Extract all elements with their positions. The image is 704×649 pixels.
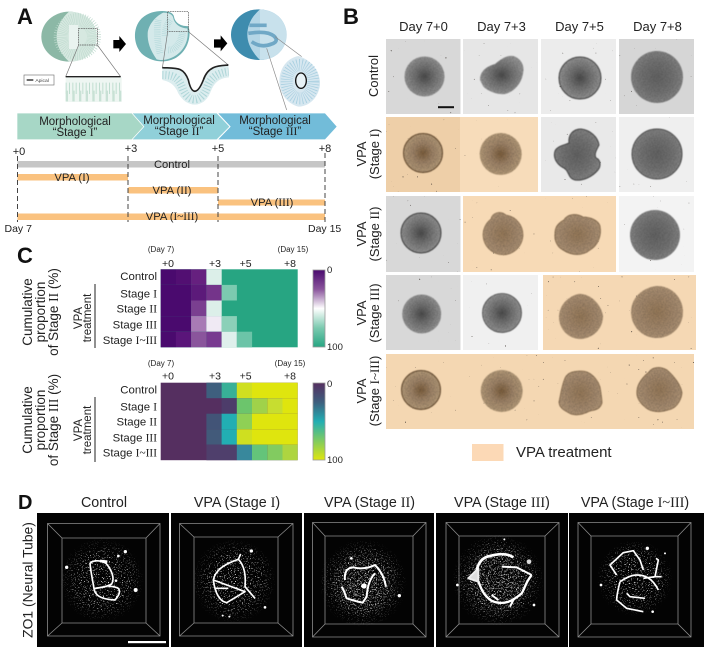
y-axis title: stage III: proportion [33, 390, 48, 450]
VPA treatment label: stage II [73, 284, 95, 348]
row and column labels: stage III: (Day 15) [275, 359, 306, 368]
timeline chart: VPA (III) [251, 197, 294, 209]
organoids: stage I row [404, 129, 682, 180]
row and column labels: stage III: Stage I~III [103, 448, 157, 460]
stage banner III: Morphological [239, 115, 311, 127]
timeline chart: +3 [125, 143, 137, 155]
colour bar: stage III [313, 379, 343, 466]
legend: apical [24, 75, 54, 85]
row and column labels: stage III: Stage I [120, 401, 157, 413]
row labels: (Stage I) [367, 129, 382, 179]
column titles: VPA (Stage III) [454, 495, 550, 511]
y-axis label: ZO1 (Neural Tube) [20, 522, 36, 638]
column headers: Day 7+8 [633, 19, 682, 34]
panel D: ZO1 confocal images [18, 492, 704, 647]
timeline chart: +0 [13, 146, 25, 158]
illustration: stage III organoid [231, 9, 320, 110]
VPA treatment label: stage II: treatment [82, 293, 94, 342]
row and column labels: stage II: (Day 7) [148, 245, 174, 254]
row labels: (Stage III) [367, 283, 382, 343]
arrow 1 [113, 36, 126, 52]
row labels: VPA [354, 141, 369, 167]
row and column labels: stage III: (Day 7) [148, 359, 174, 368]
timeline chart: Day 7 [4, 223, 32, 235]
column headers [399, 19, 682, 34]
timeline chart: +5 [212, 143, 224, 155]
row and column labels: stage II: Stage I~III [103, 335, 157, 347]
stage banner II [133, 113, 229, 139]
row labels: VPA [354, 378, 369, 404]
row and column labels: stage III: Stage II [116, 417, 157, 429]
row and column labels: stage II: Stage II [116, 304, 157, 316]
organoids: stage III row [402, 286, 683, 339]
legend: apical: Apical [35, 78, 49, 84]
row and column labels: stage II: +3 [209, 258, 221, 270]
row and column labels: stage III: Stage III [113, 433, 157, 445]
panel A: stages and timeline [4, 4, 341, 235]
stage banner II: Morphological [143, 115, 215, 127]
panel C: heat maps [17, 243, 343, 466]
stage banner I [17, 113, 143, 139]
VPA treatment label: stage II: VPA [73, 307, 85, 329]
heat map: stage III [161, 383, 298, 460]
stage banner I: “Stage I” [53, 127, 98, 139]
image: VPA stage III [436, 513, 568, 647]
y-axis title: stage II: proportion [33, 282, 48, 342]
column titles [81, 495, 689, 511]
image: VPA stage I [171, 513, 302, 647]
organoids: stage I~III row [402, 368, 682, 415]
row and column labels: stage II: +8 [284, 258, 296, 270]
timeline chart: VPA (I~III) [146, 211, 199, 223]
row and column labels: stage II: Stage III [113, 319, 157, 331]
heading C: C [17, 243, 33, 268]
row labels: Control [366, 55, 381, 97]
legend: VPA treatment [472, 444, 612, 461]
timeline chart: VPA (II) [153, 185, 192, 197]
timeline chart: +8 [319, 143, 331, 155]
row and column labels: stage III: +3 [209, 370, 221, 382]
row and column labels: stage III: Control [120, 384, 157, 396]
stage banner I: Morphological [39, 116, 111, 128]
row and column labels: stage II: (Day 15) [278, 245, 309, 254]
VPA treatment label: stage III [73, 397, 95, 462]
row and column labels: stage III: +8 [284, 370, 296, 382]
timeline chart: Control [154, 159, 190, 171]
column headers: Day 7+0 [399, 19, 448, 34]
column titles: VPA (Stage I) [194, 495, 280, 511]
image backgrounds [386, 39, 696, 429]
row and column labels: stage II: +0 [162, 258, 174, 270]
debris specks [386, 39, 696, 430]
row labels: (Stage I~III) [367, 356, 382, 426]
colour bar: stage II: 100 [327, 342, 343, 353]
legend: VPA treatment: VPA treatment [516, 444, 612, 461]
y-axis title: stage III [20, 374, 61, 466]
illustration: stage II organoid [135, 11, 229, 105]
heading B: B [343, 4, 359, 29]
row labels [354, 55, 382, 426]
VPA treatment label: stage III: VPA [73, 419, 85, 441]
y-axis title: stage III: of Stage III (%) [46, 374, 61, 466]
image: VPA stage II [304, 513, 434, 647]
stage banner III [218, 113, 337, 139]
heading A: A [17, 4, 33, 29]
colour bar: stage III: 100 [327, 455, 343, 466]
stage banner III: “Stage III” [249, 126, 301, 138]
column titles: Control [81, 495, 127, 511]
timeline chart: VPA (I) [54, 172, 90, 184]
heading D: D [18, 492, 32, 514]
row and column labels: stage II [103, 245, 309, 347]
timeline chart: Day 15 [308, 223, 341, 235]
column headers: Day 7+3 [477, 19, 526, 34]
heat map: stage II [161, 269, 298, 347]
y-axis title: stage III: Cumulative [20, 386, 35, 454]
illustration: stage I organoid [41, 12, 122, 102]
row labels: VPA [354, 300, 369, 326]
row labels: (Stage II) [367, 207, 382, 261]
image: control [37, 513, 169, 647]
row and column labels: stage III: +5 [240, 370, 252, 382]
panel B: brightfield image grid [343, 4, 696, 461]
timeline chart [4, 143, 341, 235]
organoids: stage II row [401, 210, 680, 260]
y-axis title: stage II: Cumulative [20, 278, 35, 346]
colour bar: stage III: 0 [327, 379, 332, 390]
row and column labels: stage III: +0 [162, 370, 174, 382]
arrow 2 [214, 35, 227, 51]
colour bar: stage II: 0 [327, 265, 332, 276]
column titles: VPA (Stage I~III) [581, 495, 689, 511]
column titles: VPA (Stage II) [324, 495, 415, 511]
colour bar: stage II [313, 265, 343, 353]
row and column labels: stage III [103, 359, 306, 460]
VPA treatment label: stage III: treatment [82, 405, 94, 454]
image: VPA stage I~III [569, 513, 704, 647]
scale bar [438, 106, 454, 108]
y-axis title: stage II [20, 268, 61, 356]
row and column labels: stage II: +5 [240, 258, 252, 270]
row labels: VPA [354, 221, 369, 247]
y-axis title: stage II: of Stage II (%) [46, 268, 61, 356]
column headers: Day 7+5 [555, 19, 604, 34]
row and column labels: stage II: Control [120, 271, 157, 283]
row and column labels: stage II: Stage I [120, 288, 157, 300]
organoids: control row [404, 51, 683, 103]
stage banner II: “Stage II” [155, 126, 203, 138]
